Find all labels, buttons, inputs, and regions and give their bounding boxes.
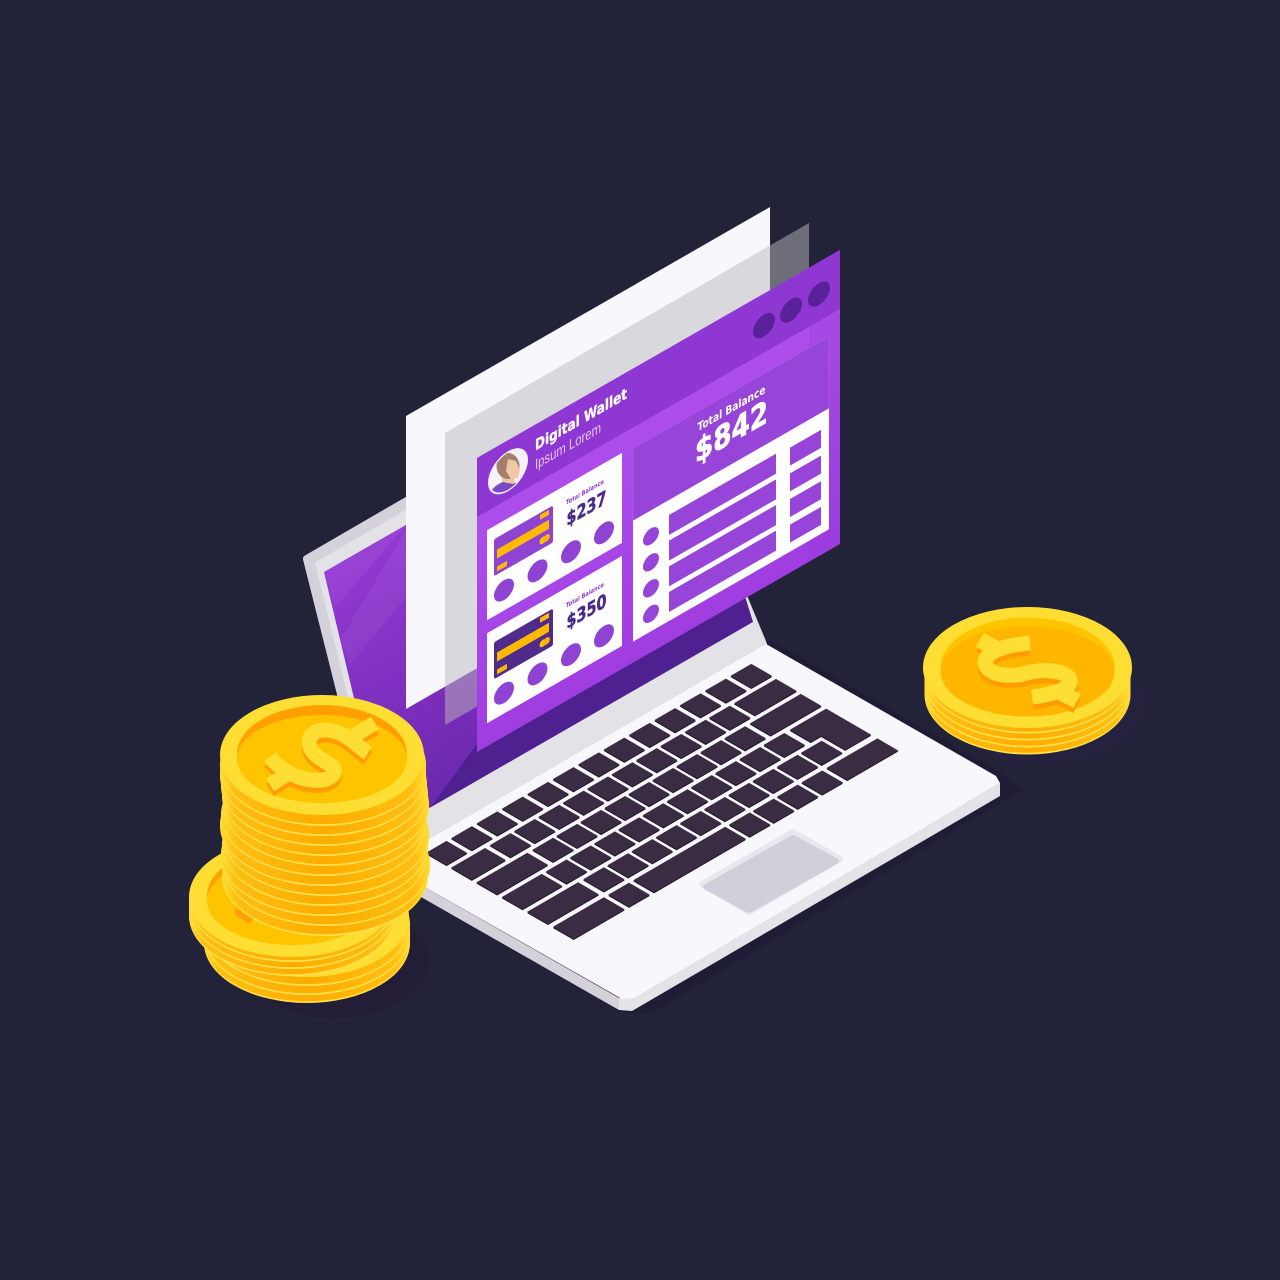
amount: $350 (566, 589, 607, 634)
label: Total Balance (566, 477, 604, 507)
coin: middle stack (189, 837, 395, 976)
window dots (753, 277, 830, 343)
label: Total Balance (566, 580, 604, 610)
shadow: left coins (241, 902, 429, 1018)
avatar circle (488, 440, 528, 503)
keyboard (425, 664, 900, 940)
total balance summary (633, 336, 829, 522)
icon: dollar sign (980, 640, 1077, 706)
floating grey window (445, 223, 809, 725)
coin: right stack (923, 607, 1132, 754)
laptop base (386, 622, 1000, 1011)
laptop (307, 362, 1000, 1011)
credit card dark (494, 608, 553, 679)
card: balance 350 (487, 556, 622, 723)
subtitle: Ipsum Lorem: Ipsum Lorem (535, 419, 601, 473)
credit card purple (494, 505, 553, 576)
icon: dollar sign (270, 723, 375, 790)
amount: $842 (695, 393, 768, 472)
label: Total Balance (698, 382, 766, 434)
amount: $237 (566, 486, 607, 531)
floating white window (406, 207, 770, 709)
transaction table (633, 408, 829, 642)
title: Digital Wallet: Digital Wallet (535, 384, 627, 454)
shadow: right coin (938, 640, 1146, 764)
coin: lower stack (204, 857, 410, 1003)
laptop screen lid (307, 362, 766, 840)
header band (477, 250, 840, 517)
touchpad (702, 832, 840, 912)
card: balance 237 (487, 453, 622, 620)
shadow: laptop (615, 640, 1022, 1014)
coin: main stack (220, 695, 430, 936)
avatar portrait (492, 453, 520, 492)
panel: digital wallet window (477, 250, 840, 752)
